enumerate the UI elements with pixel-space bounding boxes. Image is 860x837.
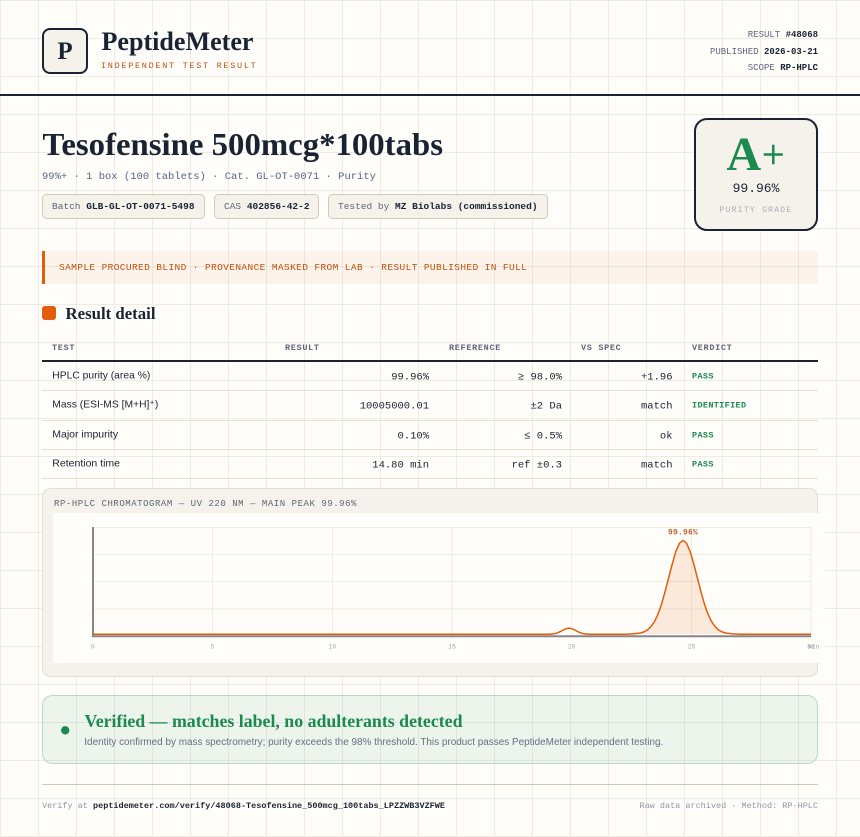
verified description: Identity confirmed by mass spectrometry; purity exceeds the 98% threshold. This product passes PeptideMeter independent testing. xyxy=(84,737,663,748)
row: major impurity xyxy=(42,429,818,450)
row: mass: IDENTIFIED xyxy=(692,401,746,411)
metadata chips xyxy=(42,194,548,218)
chip: tested by: Tested by MZ Biolabs (commissioned) xyxy=(338,201,538,212)
grade caption: PURITY GRADE xyxy=(720,206,792,215)
product subtitle: 99%+ · 1 box (100 tablets) · Cat. GL-OT-0071 · Purity xyxy=(42,171,376,183)
x axis ticks: min xyxy=(808,644,819,650)
row: major impurity: PASS xyxy=(692,431,714,441)
archive note: Raw data archived · Method: RP-HPLC xyxy=(639,801,818,811)
row: retention time: PASS xyxy=(692,460,714,470)
row: mass: Mass (ESI-MS [M+H]⁺) xyxy=(52,399,158,411)
grade letter xyxy=(726,128,785,181)
status dot xyxy=(61,726,69,734)
row: HPLC purity xyxy=(42,370,818,391)
results table xyxy=(42,343,818,479)
result metadata: PUBLISHED 2026-03-21 xyxy=(710,47,819,57)
row: major impurity: ok xyxy=(660,430,672,442)
x axis ticks: 30 xyxy=(807,644,815,650)
x axis ticks xyxy=(91,644,819,650)
result metadata: RESULT #48068 xyxy=(748,30,818,40)
brand name: PeptideMeter xyxy=(102,27,254,56)
verified callout xyxy=(42,696,818,764)
result metadata: SCOPE RP-HPLC xyxy=(748,63,819,73)
chip: tested by xyxy=(328,194,548,218)
verification link: Verify at peptidemeter.com/verify/48068-Tesofensine_500mcg_100tabs_LPZZWB3VZFWE xyxy=(42,801,445,811)
main peak fill xyxy=(626,540,740,634)
product title: Tesofensine 500mcg*100tabs xyxy=(42,126,443,162)
blind sample banner xyxy=(42,251,818,284)
row: retention time: 14.80 min xyxy=(372,460,429,472)
table header: REFERENCE xyxy=(449,343,501,353)
row: major impurity: Major impurity xyxy=(52,429,119,441)
row: retention time: match xyxy=(641,460,672,472)
row: mass: match xyxy=(641,400,672,412)
row: retention time: Retention time xyxy=(52,458,120,470)
blind sample banner: SAMPLE PROCURED BLIND · PROVENANCE MASKED FROM LAB · RESULT PUBLISHED IN FULL xyxy=(59,262,527,273)
row: HPLC purity: ≥ 98.0% xyxy=(518,371,563,383)
row: HPLC purity: PASS xyxy=(692,372,714,382)
section heading: result detail: Result detail xyxy=(66,304,156,323)
verified heading: Verified — matches label, no adulterants detected xyxy=(84,711,463,731)
brand tagline: INDEPENDENT TEST RESULT xyxy=(101,61,257,71)
row: retention time: ref ±0.3 xyxy=(512,460,562,472)
x axis ticks: 10 xyxy=(328,644,336,650)
grade card xyxy=(695,119,817,230)
row: HPLC purity: HPLC purity (area %) xyxy=(52,370,150,382)
logo badge xyxy=(43,29,87,73)
x axis ticks: 15 xyxy=(448,644,456,650)
grade letter: + xyxy=(762,132,785,177)
trace line xyxy=(93,540,811,634)
header rule xyxy=(0,94,860,96)
grade purity value: 99.96% xyxy=(733,181,780,196)
row: mass: ±2 Da xyxy=(530,400,562,412)
table header: VS SPEC xyxy=(581,343,621,353)
chromatogram panel xyxy=(42,488,825,676)
table header: VERDICT xyxy=(692,343,732,353)
x axis ticks: 25 xyxy=(688,644,695,650)
row: major impurity: 0.10% xyxy=(397,430,430,442)
chip: batch xyxy=(42,194,204,218)
result metadata xyxy=(710,30,819,73)
header xyxy=(0,27,860,96)
table header xyxy=(42,343,818,362)
chromatogram title: RP-HPLC CHROMATOGRAM — UV 220 NM — MAIN PEAK 99.96% xyxy=(54,499,357,509)
peak label: 99.96% xyxy=(668,529,698,538)
chart plot xyxy=(53,513,825,663)
chip: batch: Batch GLB-GL-OT-0071-5498 xyxy=(52,201,195,212)
row: HPLC purity: 99.96% xyxy=(391,371,430,383)
row: mass: 10005000.01 xyxy=(360,400,429,412)
logo badge: P xyxy=(57,38,73,65)
x axis ticks: 20 xyxy=(568,644,576,650)
axes xyxy=(93,527,811,636)
x axis ticks: 0 xyxy=(91,644,95,650)
chip: CAS: CAS 402856-42-2 xyxy=(224,201,310,212)
chip: CAS xyxy=(214,194,318,218)
row: HPLC purity: +1.96 xyxy=(641,371,672,383)
table header: RESULT xyxy=(285,343,320,353)
row: mass xyxy=(42,399,818,421)
x axis ticks: 5 xyxy=(211,644,215,650)
row: retention time xyxy=(42,458,818,479)
row: major impurity: ≤ 0.5% xyxy=(524,430,563,442)
grade letter: A xyxy=(726,128,762,181)
footer xyxy=(42,784,818,811)
table header: TEST xyxy=(52,343,75,353)
